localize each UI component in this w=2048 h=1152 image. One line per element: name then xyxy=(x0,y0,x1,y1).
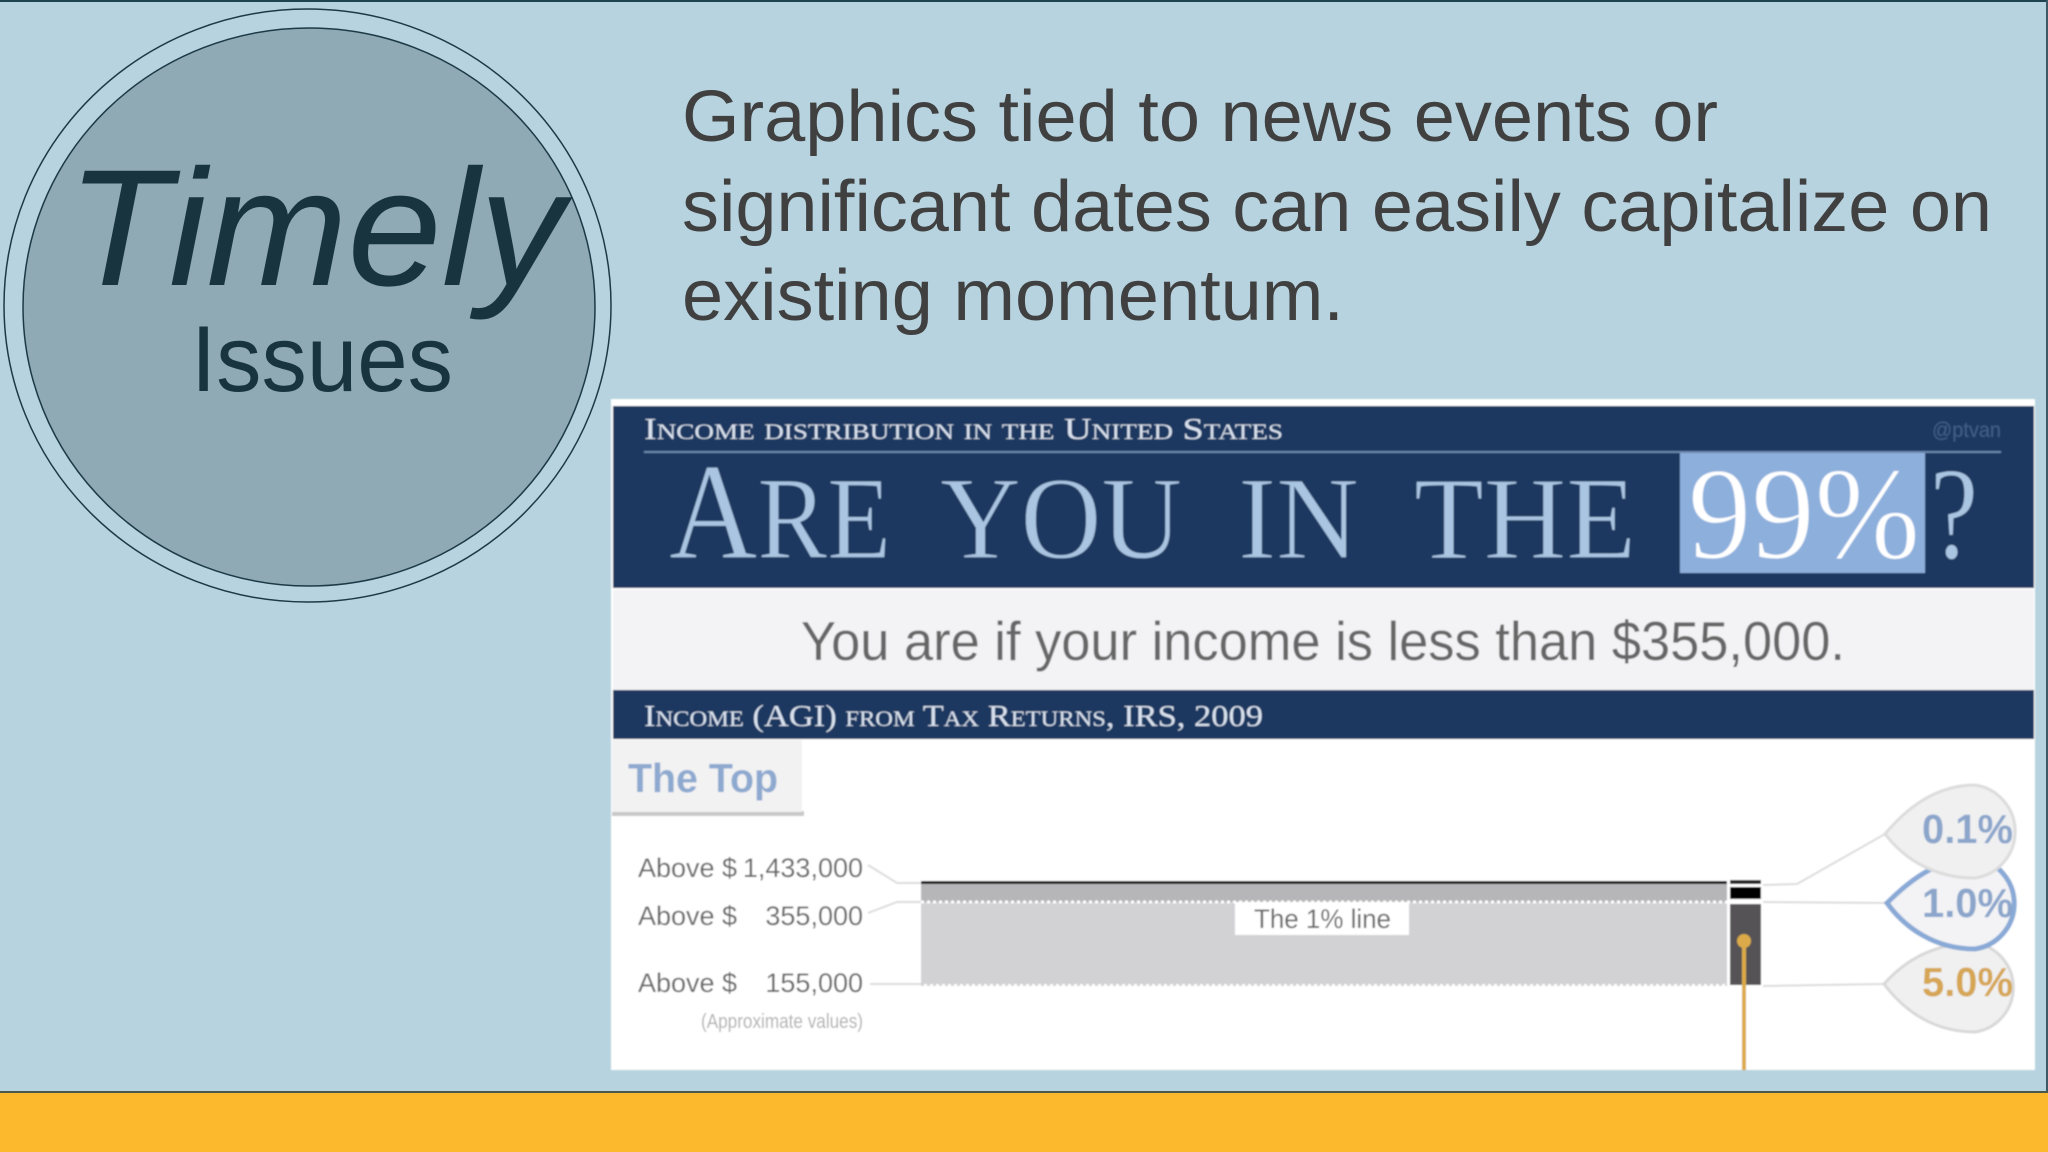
headline figure: 99% xyxy=(1688,440,1920,587)
section banner: Income (AGI) from Tax Returns, IRS, 2009 xyxy=(644,698,1263,733)
callout: 0.1%: 0.1% xyxy=(1922,806,2013,852)
callout: 1.0%: 1.0% xyxy=(1922,880,2013,926)
tab: The Top xyxy=(612,740,804,816)
answer band xyxy=(613,590,2034,690)
inner disc xyxy=(23,28,595,586)
income threshold labels: 155,000 xyxy=(765,968,863,998)
income threshold labels: 355,000 xyxy=(765,901,863,931)
callout: 5.0% xyxy=(1884,943,2013,1032)
banner kicker: Income distribution in the United States xyxy=(644,411,1283,446)
headline: YOU xyxy=(940,453,1182,584)
highlight behind 99% xyxy=(1680,453,1925,573)
header banner xyxy=(613,406,2034,588)
body text: Graphics tied to news events or xyxy=(682,77,1718,157)
headline: THE xyxy=(1414,453,1636,584)
income threshold labels xyxy=(638,853,863,1033)
body text xyxy=(682,77,1992,336)
income threshold labels: Above $ xyxy=(638,853,737,883)
leader lines xyxy=(868,834,1885,986)
answer band: You are if your income is less than $355,000. xyxy=(801,610,1845,672)
share column xyxy=(1730,880,1761,985)
income threshold labels: 1,433,000 xyxy=(743,853,863,883)
income threshold labels: Above $ xyxy=(638,901,737,931)
footer bar xyxy=(0,1091,2048,1152)
heading: Timely: Timely xyxy=(67,136,573,321)
badge: Timely Issues circle xyxy=(4,9,611,602)
credit: @ptvan xyxy=(1932,419,2001,442)
section banner xyxy=(613,690,2034,739)
callout: 1.0% xyxy=(1887,858,2014,949)
headline: IN xyxy=(1238,453,1359,584)
bar chart: top incomes xyxy=(921,880,1761,1070)
income threshold labels: (Approximate values) xyxy=(701,1011,863,1033)
panel: embedded infographic xyxy=(611,399,2035,1070)
tab: The Top: The Top xyxy=(628,755,778,801)
heading: Issues: Issues xyxy=(191,306,453,411)
callout: 5.0%: 5.0% xyxy=(1922,959,2013,1005)
marker: orange pin xyxy=(1737,934,1751,1070)
label: The 1% line: The 1% line xyxy=(1254,904,1391,934)
income threshold labels: Above $ xyxy=(638,968,737,998)
body text: significant dates can easily capitalize on xyxy=(682,167,1992,247)
headline xyxy=(669,435,1636,588)
callout: 0.1% xyxy=(1885,785,2015,878)
headline: ARE xyxy=(669,435,891,588)
outer ring xyxy=(4,9,611,602)
body text: existing momentum. xyxy=(682,256,1344,336)
question mark: ? xyxy=(1930,440,1978,587)
